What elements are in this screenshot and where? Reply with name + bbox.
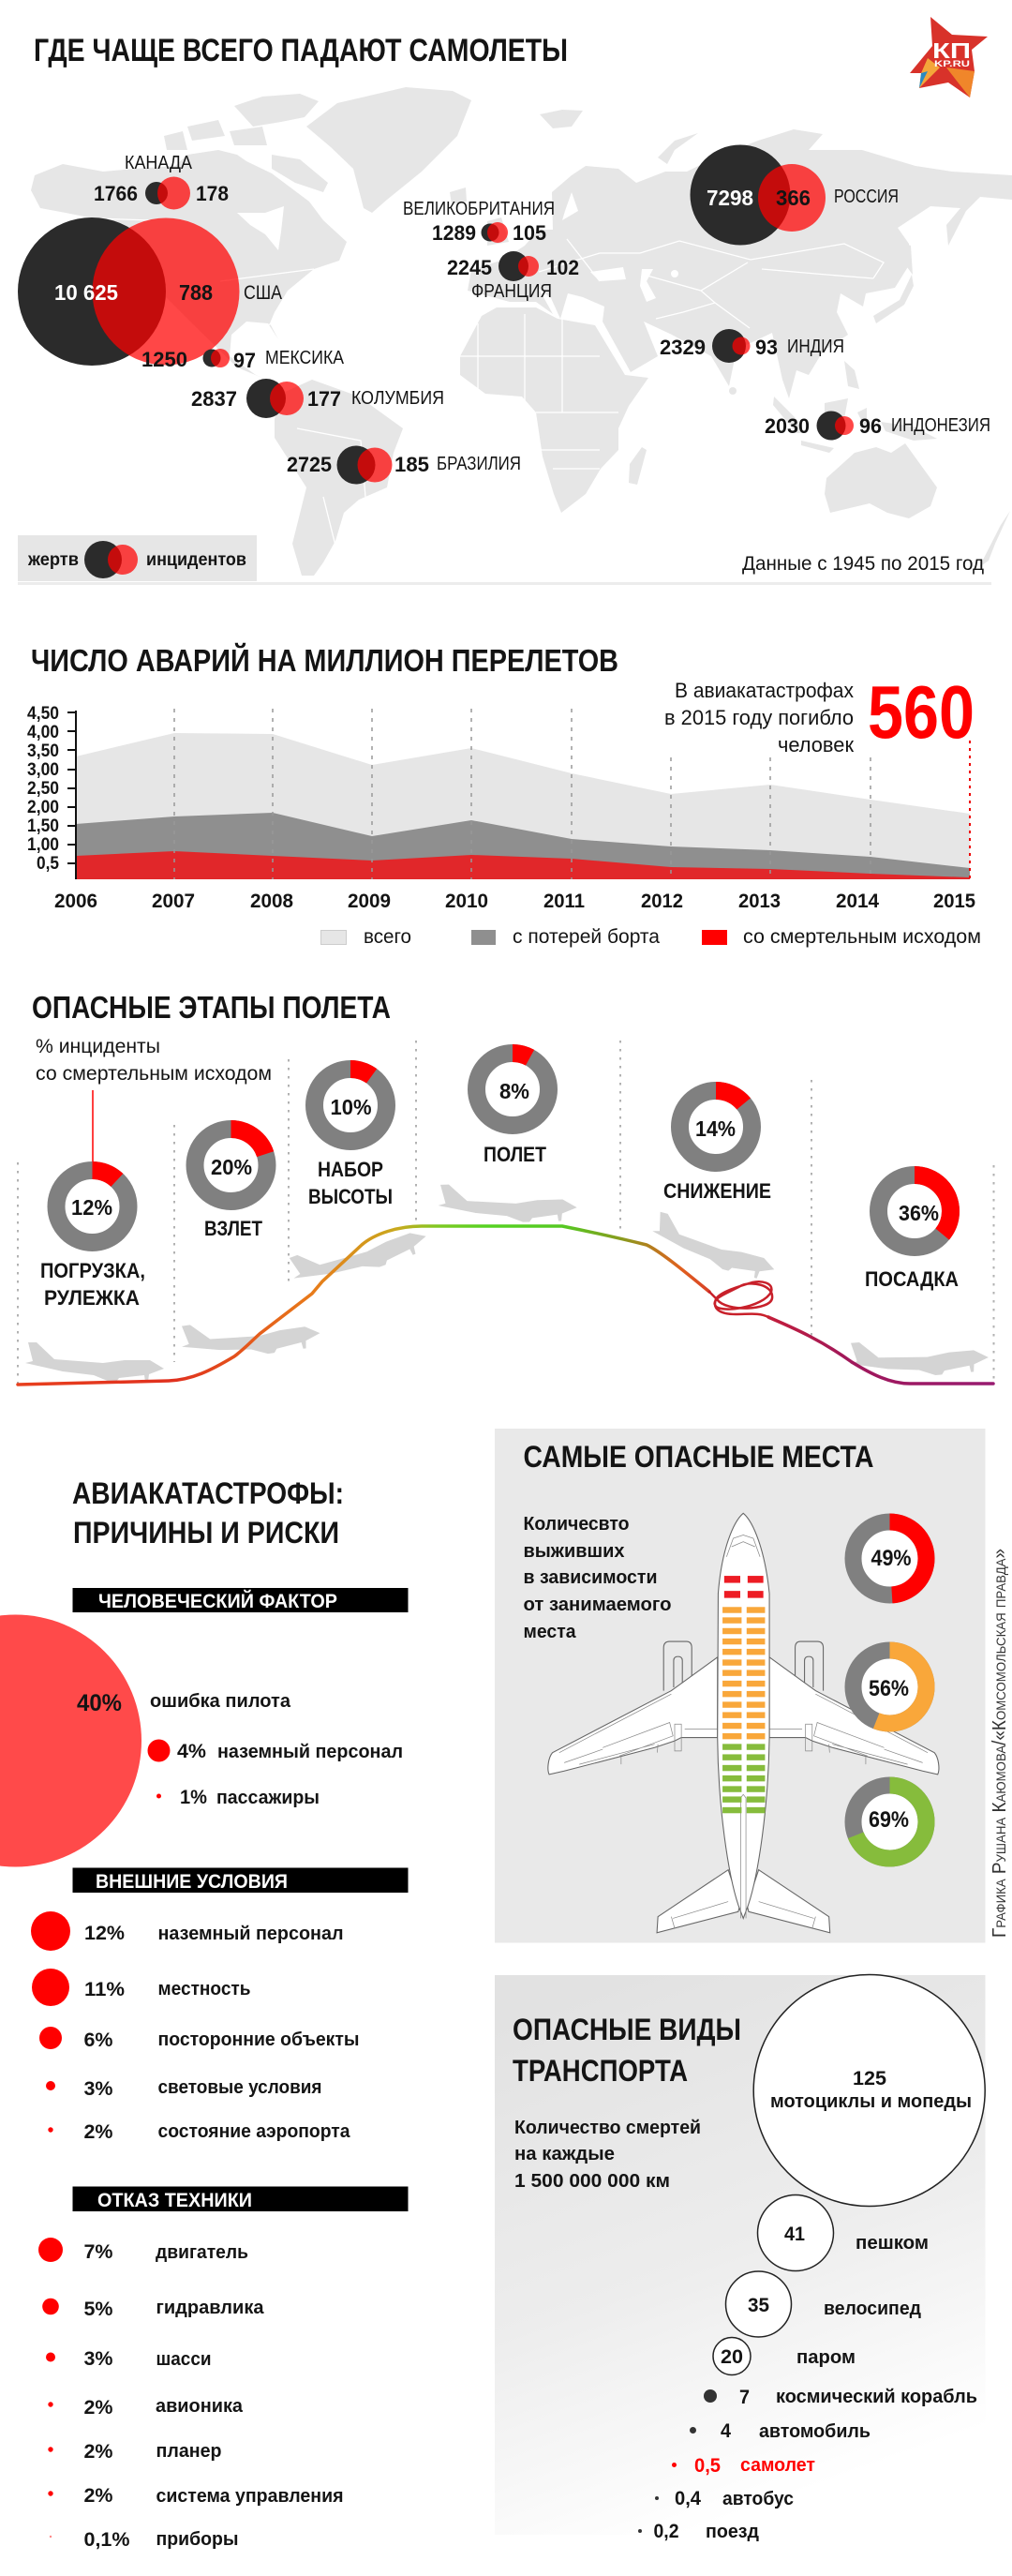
row: bus 0.4: 0,4	[675, 2488, 701, 2509]
donut: rear seats 69%	[853, 1785, 926, 1858]
bubble: ferry 20: 20	[721, 2346, 743, 2368]
group: equipment failure: авионика	[156, 2396, 244, 2417]
bubble: Colombia: 2837	[191, 387, 237, 411]
group: human factor	[0, 1588, 409, 1867]
group: equipment failure: система управления	[156, 2486, 343, 2507]
donut: cruise 8%: ПОЛЕТ	[484, 1143, 546, 1166]
aircraft top view with seat rows	[548, 1513, 939, 1933]
bubble: motorcycles 125: мотоциклы и мопеды	[770, 2091, 972, 2112]
group: equipment failure: 2%	[84, 2397, 113, 2419]
y axis labels: 0,5	[37, 854, 59, 874]
bubble: motorcycles 125	[753, 1974, 985, 2207]
row: spacecraft 7: 7	[739, 2387, 750, 2408]
y axis labels: 2,50	[27, 779, 59, 799]
bubble: Great Britain: ВЕЛИКОБРИТАНИЯ	[403, 199, 555, 219]
group: equipment failure: 3%	[84, 2348, 113, 2370]
bubble: Brazil: БРАЗИЛИЯ	[437, 454, 521, 474]
description text: от занимаемого	[523, 1595, 671, 1615]
bubble: Russia: 366	[776, 186, 811, 210]
x axis years: 2014	[836, 891, 879, 912]
row: airplane 0.5: 0,5	[694, 2455, 721, 2477]
donut: descent 14%	[663, 1091, 771, 1203]
flight path line	[18, 1226, 993, 1385]
bubble: Indonesia: ИНДОНЕЗИЯ	[891, 415, 990, 436]
donut: front seats 49%	[853, 1522, 926, 1595]
group: human factor: 40%	[77, 1690, 122, 1716]
row: car 4: автомобиль	[759, 2421, 871, 2442]
donut: cruise 8%	[476, 1054, 549, 1166]
x axis years	[54, 891, 975, 912]
donut: takeoff 20%: ВЗЛЕТ	[204, 1217, 262, 1240]
bubble: Indonesia: 2030	[765, 414, 810, 438]
callout: 560 people died in 2015	[664, 670, 975, 756]
chart legend	[320, 926, 981, 948]
panel: most dangerous seats	[495, 1429, 986, 1942]
bubble: USA	[18, 217, 282, 366]
donut: climb 10%: 10%	[330, 1095, 371, 1119]
description text: 1 500 000 000 км	[514, 2171, 670, 2192]
logo: KP star: КП	[932, 38, 971, 63]
bubble: Mexico: 1250	[141, 348, 187, 371]
bubble: USA: США	[244, 282, 282, 304]
logo: KP star: KP.RU	[934, 59, 970, 68]
heading: ТРАНСПОРТА	[513, 2054, 688, 2088]
bubble: Canada: 178	[196, 182, 229, 205]
group: external conditions: ВНЕШНИЕ УСЛОВИЯ	[96, 1871, 288, 1893]
heading: АВИАКАТАСТРОФЫ:	[72, 1476, 344, 1510]
donut: loading, taxiing 12%	[40, 1170, 145, 1310]
bubble: USA: 10 625	[54, 280, 118, 305]
group: equipment failure: шасси	[156, 2349, 212, 2370]
donut: landing 36%	[865, 1176, 959, 1291]
bubble: on foot 41: 41	[784, 2224, 805, 2245]
y axis labels: 3,00	[27, 760, 59, 780]
callout: 560 people died in 2015: в 2015 году погибло	[664, 706, 854, 729]
x axis years: 2007	[152, 891, 195, 912]
bubble: Brazil: 2725	[287, 453, 332, 476]
group: external conditions: 11%	[84, 1979, 125, 2000]
chart legend: со смертельным исходом	[743, 926, 981, 948]
row: bus 0.4: автобус	[722, 2489, 794, 2509]
donut: landing 36%: 36%	[899, 1201, 939, 1225]
bubble: India: 93	[755, 336, 778, 359]
x axis years: 2010	[445, 891, 488, 912]
seats: rear, green	[722, 1744, 765, 1813]
donut: front seats 49%: 49%	[871, 1546, 911, 1571]
bubble: France	[447, 251, 579, 302]
legend: victims and incidents: инцидентов	[146, 550, 246, 570]
bubble: Russia: РОССИЯ	[834, 187, 899, 207]
donut: landing 36%: ПОСАДКА	[865, 1267, 959, 1291]
donut: middle seats 56%	[853, 1650, 926, 1723]
heading: ОПАСНЫЕ ЭТАПЫ ПОЛЕТА	[32, 990, 391, 1025]
area chart	[67, 709, 970, 879]
seats: middle, orange	[722, 1607, 765, 1739]
bubble: Indonesia: 96	[859, 414, 882, 438]
group: external conditions: посторонние объекты	[157, 2029, 360, 2050]
section: causes and risks	[0, 1476, 409, 2551]
bubble: bicycle 35: велосипед	[824, 2299, 921, 2319]
bubble: Great Britain: 105	[513, 221, 546, 245]
group: external conditions: 3%	[84, 2078, 113, 2100]
bubble: Canada: 1766	[94, 182, 138, 205]
donut: loading, taxiing 12%: РУЛЕЖКА	[44, 1286, 140, 1310]
group: equipment failure: 5%	[84, 2299, 113, 2320]
y axis labels: 3,50	[27, 741, 59, 761]
y axis labels: 4,00	[27, 723, 59, 742]
bubble: bicycle 35: 35	[748, 2295, 769, 2316]
donut: rear seats 69%: 69%	[869, 1807, 909, 1833]
description text: Количество смертей	[514, 2118, 701, 2138]
y axis labels: 1,50	[27, 816, 59, 836]
x axis years: 2008	[250, 891, 293, 912]
heading: ЧИСЛО АВАРИЙ НА МИЛЛИОН ПЕРЕЛЕТОВ	[31, 642, 618, 678]
bubble: Russia: 7298	[707, 186, 753, 210]
x axis years: 2012	[641, 891, 683, 912]
row: train 0.2: поезд	[706, 2522, 759, 2542]
row: airplane 0.5: самолет	[740, 2455, 815, 2476]
group: human factor: наземный персонал	[217, 1742, 403, 1762]
description text: в зависимости	[523, 1567, 658, 1588]
note: percent of fatal incidents	[36, 1036, 272, 1162]
row: bus 0.4	[655, 2488, 794, 2509]
x axis years: 2013	[738, 891, 781, 912]
row: car 4: 4	[721, 2420, 731, 2442]
bubble: India: ИНДИЯ	[787, 337, 844, 357]
donut: middle seats 56%: 56%	[869, 1676, 909, 1701]
bubble: on foot 41	[757, 2195, 929, 2270]
heading	[72, 1476, 344, 1550]
group: external conditions: 12%	[84, 1923, 125, 1944]
world map background	[31, 87, 1012, 576]
heading: САМЫЕ ОПАСНЫЕ МЕСТА	[523, 1440, 873, 1474]
description text	[514, 2118, 701, 2192]
bubble: Mexico	[141, 348, 345, 372]
heading: ПРИЧИНЫ И РИСКИ	[73, 1516, 339, 1550]
bubble: Colombia: КОЛУМБИЯ	[351, 388, 444, 409]
group: human factor: 1%	[180, 1787, 207, 1808]
bubble: Mexico: МЕКСИКА	[265, 348, 345, 368]
x axis years: 2011	[543, 891, 585, 912]
bubble: France: 102	[546, 256, 579, 279]
section: accidents per million flights	[27, 642, 981, 948]
donut: climb 10%: ВЫСОТЫ	[308, 1185, 393, 1208]
section: world map of crashes	[18, 17, 1012, 585]
donut: cruise 8%: 8%	[499, 1079, 529, 1103]
donut: loading, taxiing 12%: ПОГРУЗКА,	[40, 1259, 145, 1282]
data period note: Данные с 1945 по 2015 год	[742, 553, 984, 575]
bubble: ferry 20	[713, 2338, 856, 2375]
y axis labels: 2,00	[27, 798, 59, 817]
heading: ОПАСНЫЕ ВИДЫ	[513, 2013, 741, 2046]
donut: takeoff 20%: 20%	[211, 1155, 252, 1179]
callout: 560 people died in 2015: 560	[868, 670, 975, 754]
note: percent of fatal incidents: со смертельным исходом	[36, 1063, 272, 1085]
donut: descent 14%: СНИЖЕНИЕ	[663, 1179, 771, 1203]
x axis years: 2009	[348, 891, 391, 912]
note: percent of fatal incidents: % инциденты	[36, 1036, 160, 1057]
panel: dangerous modes of transport	[495, 1974, 986, 2542]
seats: front, red	[724, 1576, 764, 1598]
group: equipment failure: 2%	[84, 2485, 113, 2507]
bubble: Canada: КАНАДА	[125, 153, 193, 173]
donut: descent 14%: 14%	[695, 1116, 736, 1141]
group: external conditions: местность	[157, 1979, 251, 1999]
donut: climb 10%: НАБОР	[318, 1158, 383, 1181]
bubble: on foot 41: пешком	[856, 2233, 929, 2254]
row: train 0.2	[638, 2521, 759, 2542]
group: equipment failure: 7%	[84, 2241, 113, 2263]
bubble: Indonesia	[765, 411, 990, 441]
row: car 4	[690, 2420, 871, 2442]
bubble: France: ФРАНЦИЯ	[471, 281, 552, 302]
group: equipment failure: двигатель	[156, 2242, 248, 2263]
title: ГДЕ ЧАЩЕ ВСЕГО ПАДАЮТ САМОЛЕТЫ	[34, 33, 568, 68]
group: external conditions: наземный персонал	[157, 1924, 343, 1944]
bubble: Great Britain: 1289	[432, 221, 476, 245]
chart legend: всего	[364, 926, 411, 948]
group: equipment failure: 0,1%	[84, 2529, 130, 2551]
description text	[523, 1514, 671, 1642]
callout: 560 people died in 2015: В авиакатастрофах	[675, 679, 854, 702]
y axis labels: 1,00	[27, 835, 59, 855]
bubble: USA: 788	[179, 280, 213, 305]
group: equipment failure: приборы	[156, 2529, 238, 2550]
callout: 560 people died in 2015: человек	[778, 733, 854, 756]
legend: victims and incidents: жертв	[27, 550, 79, 570]
donut: climb 10%	[308, 1069, 393, 1208]
credit line: Графика Рушана Каюмова/«Комсомольская правда»	[990, 1549, 1010, 1938]
group: human factor: пассажиры	[216, 1788, 320, 1808]
bubble: Brazil	[287, 446, 521, 484]
group: external conditions: световые условия	[157, 2077, 322, 2098]
x axis years: 2015	[933, 891, 975, 912]
group: human factor: 4%	[177, 1741, 206, 1762]
description text: Количесвто	[523, 1514, 630, 1535]
bubble: ferry 20: паром	[796, 2347, 856, 2368]
bubble: motorcycles 125: 125	[853, 2068, 886, 2089]
group: human factor: ЧЕЛОВЕЧЕСКИЙ ФАКТОР	[98, 1590, 337, 1612]
group: external conditions	[31, 1867, 409, 2143]
group: equipment failure: планер	[156, 2441, 221, 2462]
y axis labels	[27, 704, 59, 874]
bubble: Mexico: 97	[233, 349, 256, 372]
group: external conditions: 2%	[84, 2121, 113, 2143]
group: external conditions: состояние аэропорта	[157, 2121, 350, 2142]
water bodies and borders on the map	[94, 192, 884, 553]
y axis labels: 4,50	[27, 704, 59, 724]
group: human factor: ошибка пилота	[150, 1691, 291, 1712]
legend: victims and incidents	[18, 535, 257, 581]
section: dangerous flight stages	[18, 990, 993, 1385]
donut: takeoff 20%	[195, 1129, 267, 1240]
group: equipment failure: 2%	[84, 2441, 113, 2463]
bubble: France: 2245	[447, 256, 492, 279]
row: spacecraft 7: космический корабль	[776, 2387, 977, 2407]
x axis years: 2006	[54, 891, 97, 912]
group: equipment failure: гидравлика	[156, 2298, 264, 2318]
chart legend: с потерей борта	[513, 926, 660, 948]
bubble: bicycle 35	[725, 2271, 921, 2337]
description text: на каждые	[514, 2144, 615, 2164]
row: train 0.2: 0,2	[654, 2521, 678, 2542]
bubble: India: 2329	[660, 336, 706, 359]
bubble: Brazil: 185	[394, 453, 429, 476]
description text: места	[523, 1622, 576, 1642]
bubble: Canada	[94, 153, 229, 210]
group: external conditions: 6%	[84, 2029, 113, 2051]
bubble: India	[660, 329, 844, 363]
row: airplane 0.5	[672, 2455, 815, 2477]
heading	[513, 2013, 741, 2088]
group: equipment failure: ОТКАЗ ТЕХНИКИ	[97, 2190, 252, 2211]
description text: выживших	[523, 1541, 624, 1562]
bubble: Russia	[690, 144, 899, 246]
group: equipment failure	[38, 2186, 409, 2551]
plane silhouettes	[25, 1181, 990, 1383]
bubble: Colombia	[191, 379, 444, 418]
bubble: Great Britain	[403, 199, 555, 245]
donut: loading, taxiing 12%: 12%	[71, 1195, 112, 1220]
bubble: Colombia: 177	[307, 387, 341, 411]
logo: KP star	[910, 17, 988, 97]
